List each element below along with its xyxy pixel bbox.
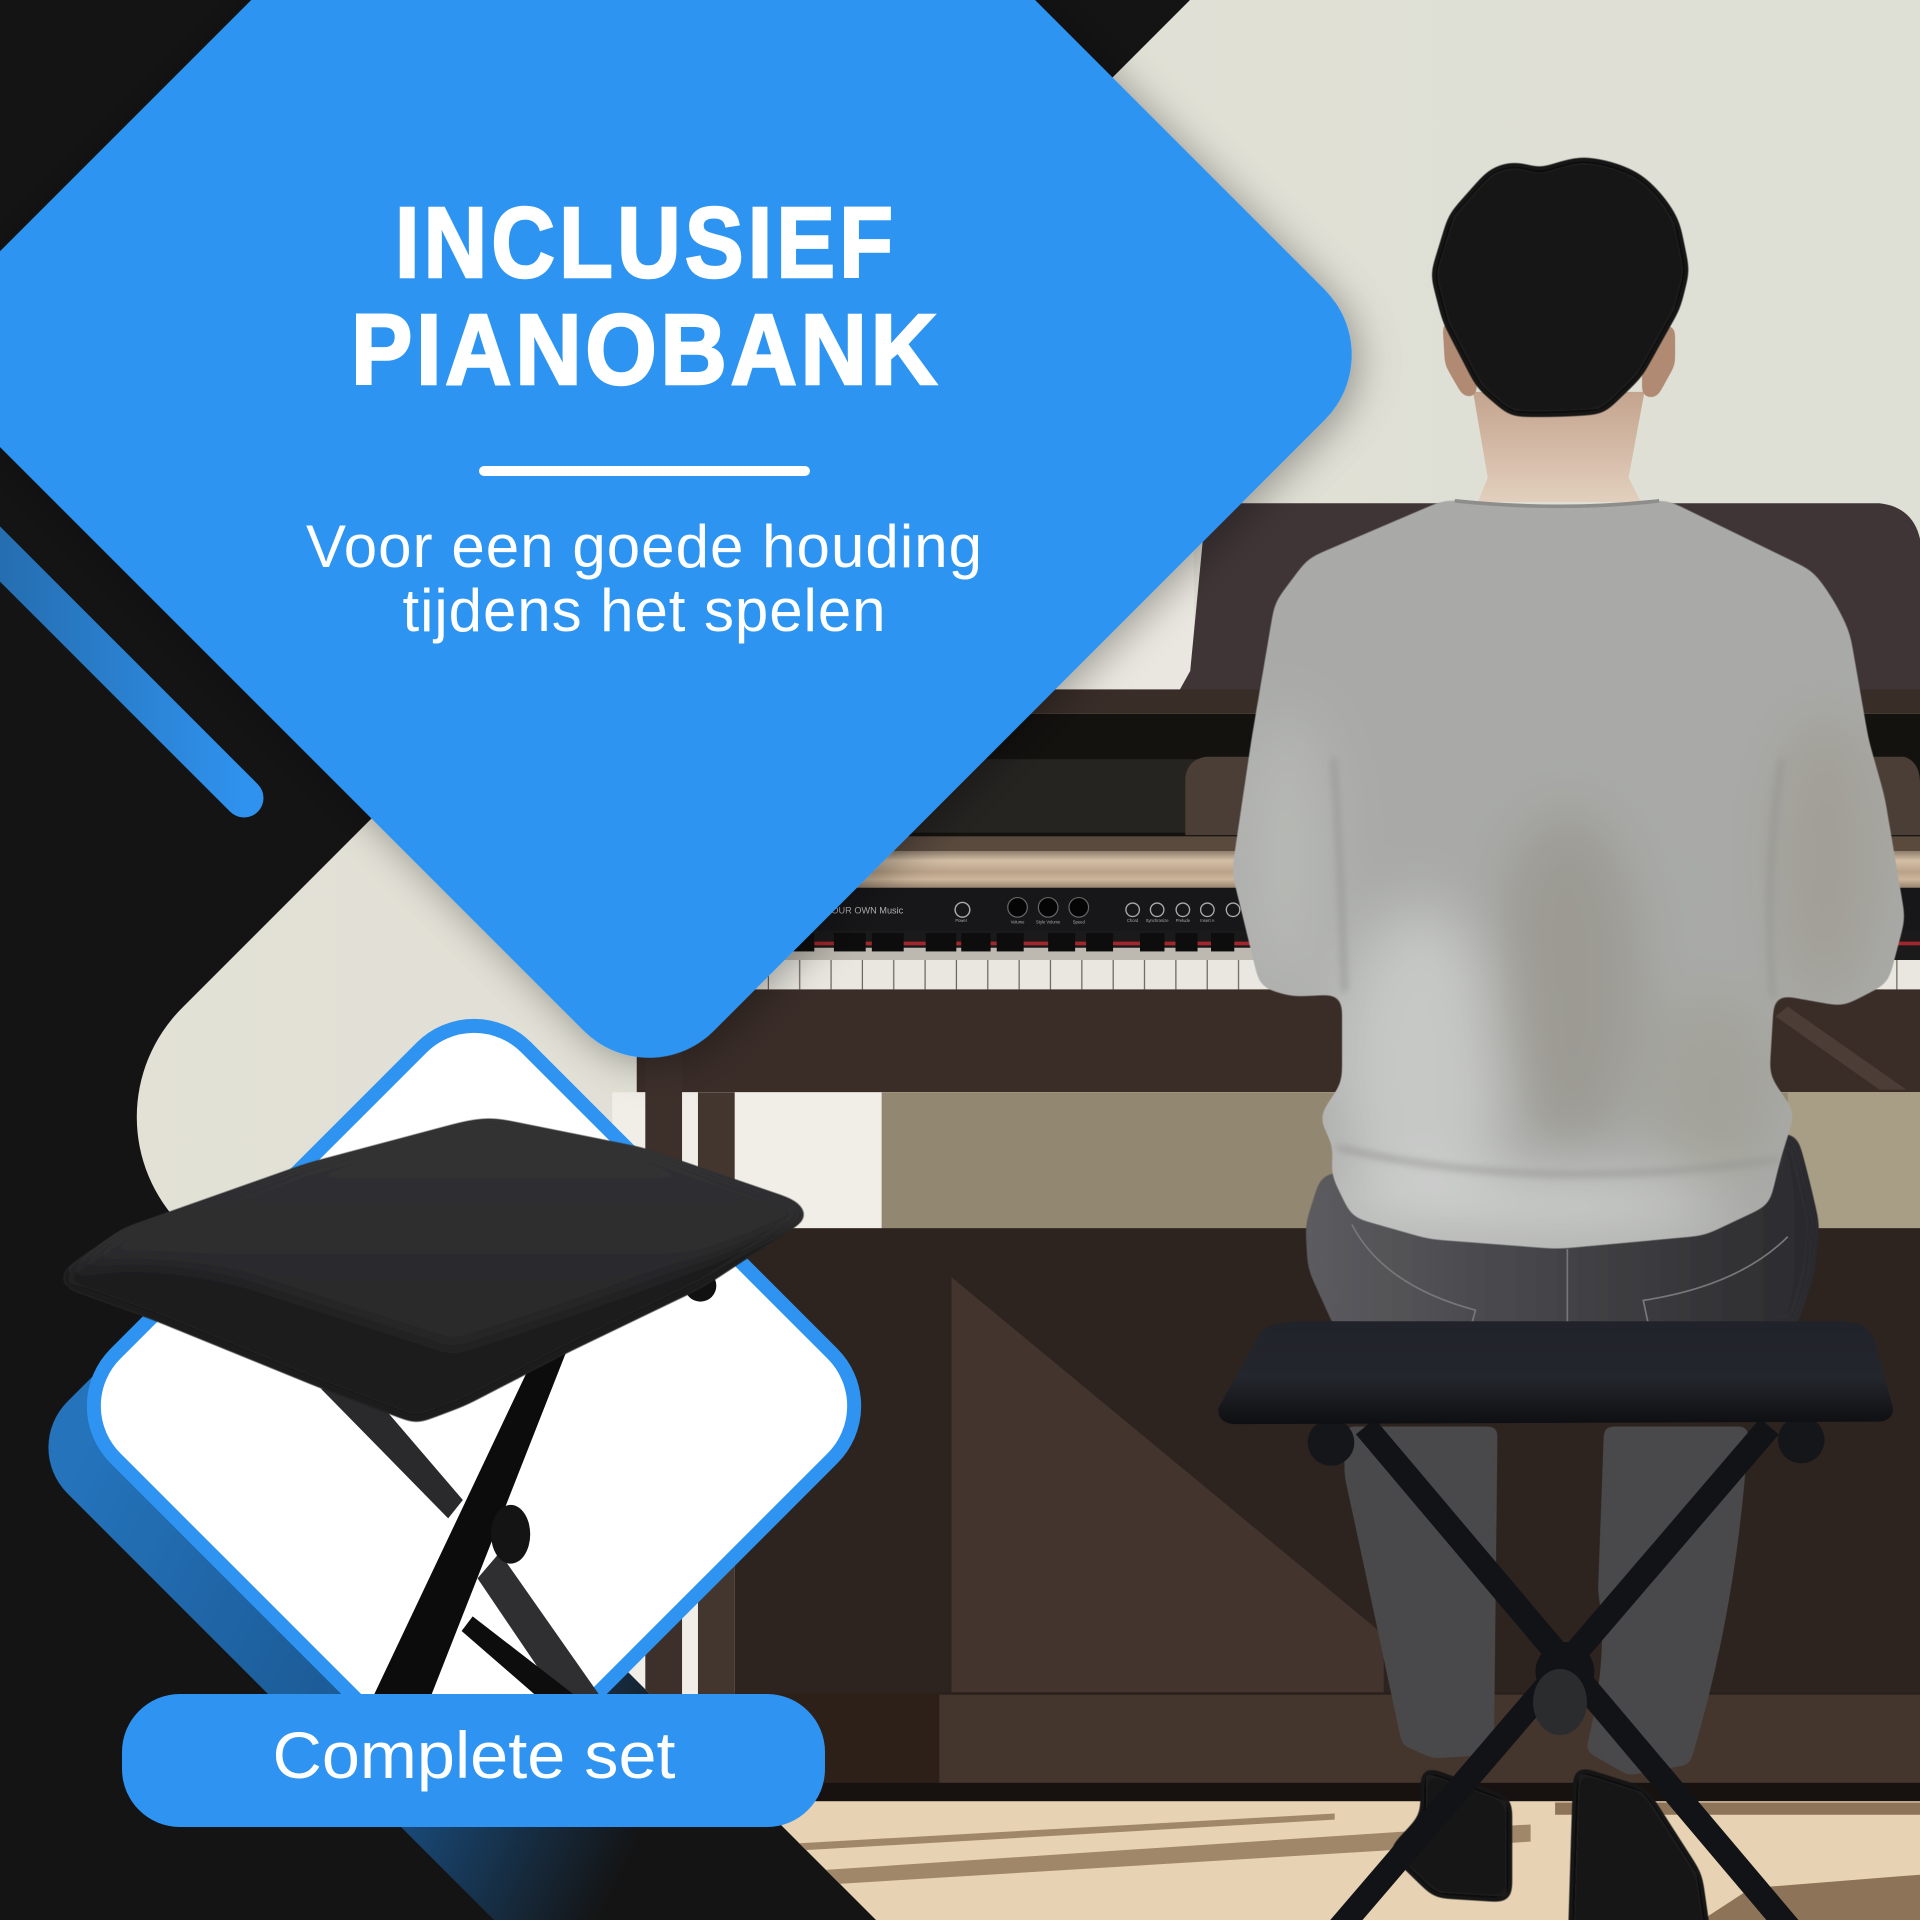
ears — [1442, 322, 1675, 398]
piano control panel: Synchronize — [1146, 918, 1169, 923]
stool underside peg — [684, 1270, 716, 1302]
heading — [351, 187, 937, 406]
person — [1212, 157, 1920, 1920]
jeans — [1306, 1134, 1820, 1322]
stool knob — [491, 1505, 530, 1564]
subheading: Voor een goede houding — [306, 513, 982, 580]
piano key slip — [637, 989, 1920, 1092]
jeans pockets and seam — [1351, 1224, 1788, 1322]
sweater — [1212, 490, 1920, 1261]
bench side knobs — [1308, 1422, 1824, 1466]
piano control panel: Power — [955, 918, 968, 923]
sweater creases — [1331, 761, 1724, 1179]
piano lower panel — [735, 1228, 1920, 1801]
piano control panel — [784, 888, 1920, 933]
piano keys — [735, 931, 1920, 989]
stool foot bar — [462, 1616, 576, 1696]
music desk — [1053, 503, 1920, 693]
stool rear leg lower — [478, 1553, 600, 1696]
piano upper body — [833, 689, 1920, 889]
calves — [1344, 1427, 1749, 1776]
subheading — [306, 513, 982, 644]
divider rule — [479, 466, 810, 476]
subheading: tijdens het spelen — [402, 577, 886, 644]
heading: INCLUSIEF — [395, 187, 893, 298]
heading: PIANOBANK — [351, 294, 937, 406]
stool seat — [61, 1118, 811, 1424]
main blue diamond — [0, 0, 1390, 1096]
piano control panel: Volume — [1011, 919, 1025, 924]
bench x frame — [1329, 1427, 1800, 1920]
hair — [1430, 157, 1690, 417]
product stool — [61, 1118, 811, 1696]
bench centre knob — [1533, 1642, 1594, 1735]
stool seat front edge — [61, 1217, 811, 1424]
piano control panel: Prelude — [1176, 918, 1191, 923]
socks — [1386, 1764, 1714, 1920]
neck — [1473, 392, 1644, 502]
sweater light and shade patches — [1244, 710, 1878, 1233]
wall — [136, 0, 1920, 1212]
stool rear leg upper — [321, 1389, 463, 1518]
piano bench — [1218, 1321, 1893, 1920]
sweater collar — [1455, 501, 1659, 506]
piano control panel: Speed — [1073, 919, 1085, 924]
piano control panel: YOUR OWN Music — [825, 905, 904, 915]
product card: white diamond — [63, 995, 885, 1817]
label text: Complete set — [272, 1718, 676, 1792]
gap beneath keyboard — [612, 1092, 1920, 1694]
bench seat — [1218, 1321, 1893, 1424]
floor — [735, 1801, 1920, 1920]
stool front leg — [373, 1347, 568, 1696]
dark blue shadow shape — [48, 1169, 900, 1920]
piano control panel: Style Volume — [1036, 919, 1061, 924]
label pill — [122, 1694, 825, 1827]
piano control panel: Insert A — [1200, 918, 1215, 923]
accent stripe — [0, 524, 244, 798]
piano control panel: Chord — [1127, 918, 1139, 923]
